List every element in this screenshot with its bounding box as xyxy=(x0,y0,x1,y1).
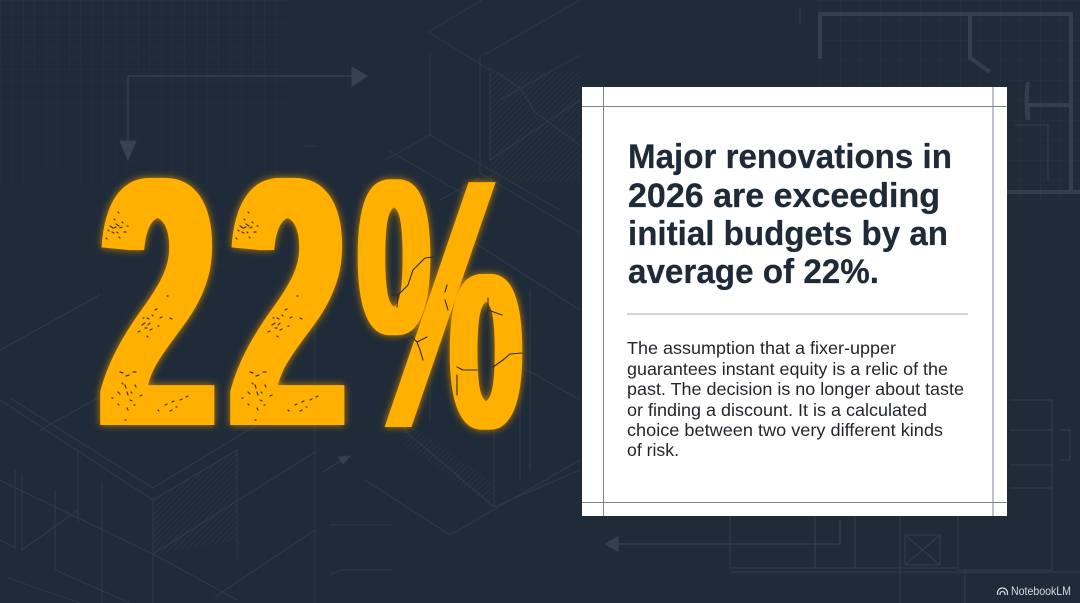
background isometric drawing: upper centre xyxy=(385,0,580,233)
background floor plan: bottom-right xyxy=(730,400,1080,603)
watermark text: NotebookLM xyxy=(1011,584,1071,598)
card body text: guarantees instant equity is a relic of the xyxy=(627,359,948,379)
card body text: choice between two very different kinds xyxy=(627,420,943,440)
cracks on percent sign xyxy=(392,257,522,395)
card heading xyxy=(628,138,952,291)
background isometric drawing: lower centre xyxy=(365,240,580,535)
icon: notebook arcs xyxy=(998,588,1008,595)
distress texture on digits xyxy=(106,212,318,420)
card body text: The assumption that a fixer-upper xyxy=(627,338,896,358)
percent sign: % xyxy=(357,106,523,503)
small arrow: diagonal xyxy=(323,456,350,472)
card heading: Major renovations in xyxy=(628,138,952,176)
card heading: 2026 are exceeding xyxy=(628,177,940,215)
card heading: average of 22%. xyxy=(628,253,879,291)
big statistic: 22% xyxy=(100,104,523,503)
card body text: or finding a discount. It is a calculated xyxy=(627,400,927,420)
card body text: of risk. xyxy=(627,440,679,460)
arrow: right-then-down dimension arrows xyxy=(120,67,367,160)
arrow: bottom left-pointing xyxy=(605,520,840,551)
background grid: top-left xyxy=(0,0,276,116)
digit 2: 2 xyxy=(100,104,216,501)
card heading: initial budgets by an xyxy=(628,215,948,253)
card body text: past. The decision is no longer about taste xyxy=(627,379,964,399)
white text card xyxy=(582,87,1006,516)
background floor plan: top-right xyxy=(800,0,1080,200)
card divider xyxy=(627,313,968,315)
background isometric drawing: lower left xyxy=(0,146,392,603)
card body text xyxy=(627,338,964,460)
card crop lines xyxy=(582,87,1006,516)
digit 2 second: 2 xyxy=(230,104,346,501)
